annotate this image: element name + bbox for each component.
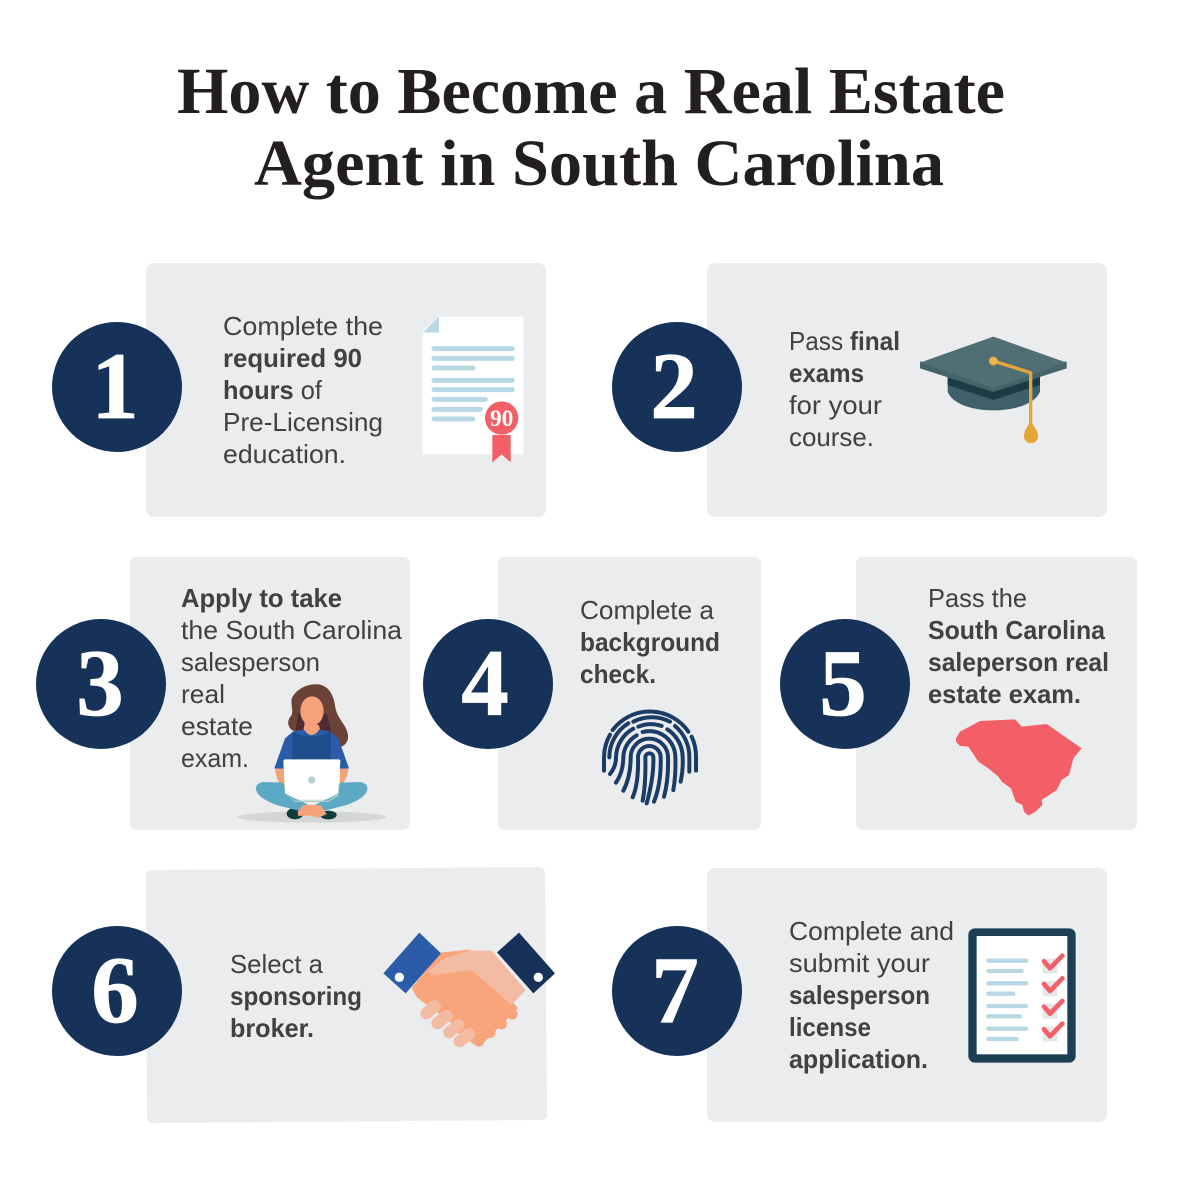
- number badge 5: 5: [819, 630, 867, 736]
- text: step 6: [230, 949, 362, 1043]
- number badge 1: [52, 322, 182, 452]
- text: step 2: course.: [789, 422, 874, 452]
- number badge 6: 6: [91, 937, 139, 1043]
- title: [177, 55, 1005, 200]
- text: step 7: application.: [789, 1044, 928, 1074]
- icon: certificate document: [423, 317, 523, 462]
- text: step 6: Select a: [230, 949, 324, 979]
- number badge 7: [612, 926, 742, 1056]
- icon: woman with laptop: [238, 684, 386, 823]
- icon: handshake: [383, 933, 555, 1043]
- text: step 3: the South Carolina: [181, 615, 403, 645]
- text: step 7: salesperson: [789, 980, 930, 1010]
- number badge 3: 3: [76, 630, 124, 736]
- text: step 2: Pass final: [789, 326, 900, 356]
- text: step 2: exams: [789, 358, 864, 388]
- text: step 7: license: [789, 1012, 871, 1042]
- number badge 1: 1: [91, 333, 139, 439]
- text: step 3: salesperson: [181, 647, 320, 677]
- text: step 3: Apply to take: [181, 583, 342, 613]
- text: step 1: Pre-Licensing: [223, 407, 383, 437]
- icon: graduation cap: [920, 337, 1067, 443]
- number badge 5: [780, 619, 910, 749]
- text: step 3: estate: [181, 711, 253, 741]
- text: step 2: for your: [789, 390, 882, 420]
- text: step 7: submit your: [789, 948, 930, 978]
- text: step 3: exam.: [181, 743, 249, 773]
- panel: step 1: [52, 263, 546, 517]
- panel: step 3: [36, 557, 410, 830]
- number badge 4: [423, 619, 553, 749]
- text: step 5: South Carolina: [928, 615, 1106, 645]
- number badge 7: 7: [651, 937, 699, 1043]
- text: step 1: education.: [223, 439, 346, 469]
- text: step 1: [223, 311, 383, 469]
- panel: step 4: [423, 557, 761, 830]
- text: step 3: real: [181, 679, 225, 709]
- text: step 6: broker.: [230, 1013, 314, 1043]
- icon: certificate document: 90: [490, 406, 513, 432]
- panel: step 6: [52, 867, 555, 1123]
- text: step 1: hours of: [223, 375, 323, 405]
- text: step 5: [928, 583, 1109, 709]
- text: step 7: [789, 916, 954, 1074]
- text: step 1: required 90: [223, 343, 362, 373]
- text: step 5: Pass the: [928, 583, 1027, 613]
- text: step 4: Complete a: [580, 595, 715, 625]
- text: step 5: estate exam.: [928, 679, 1081, 709]
- number badge 3: [36, 619, 166, 749]
- text: step 5: saleperson real: [928, 647, 1109, 677]
- icon: South Carolina map: [956, 719, 1082, 816]
- text: step 7: Complete and: [789, 916, 954, 946]
- panel: step 7: [612, 868, 1107, 1122]
- number badge 2: 2: [650, 333, 698, 439]
- panel: step 2: [612, 263, 1107, 517]
- text: step 1: Complete the: [223, 311, 383, 341]
- text: step 4: check.: [580, 659, 656, 689]
- icon: fingerprint: [604, 711, 696, 803]
- text: step 4: [580, 595, 720, 689]
- text: step 3: [181, 583, 403, 773]
- title: Agent in South Carolina: [254, 127, 944, 200]
- panel: step 5: [780, 557, 1137, 830]
- text: step 6: sponsoring: [230, 981, 362, 1011]
- text: step 2: [789, 326, 900, 452]
- number badge 4: 4: [461, 630, 509, 736]
- number badge 2: [612, 322, 742, 452]
- number badge 6: [52, 926, 182, 1056]
- icon: checklist: [968, 928, 1076, 1063]
- text: step 4: background: [580, 627, 720, 657]
- title: How to Become a Real Estate: [177, 55, 1005, 128]
